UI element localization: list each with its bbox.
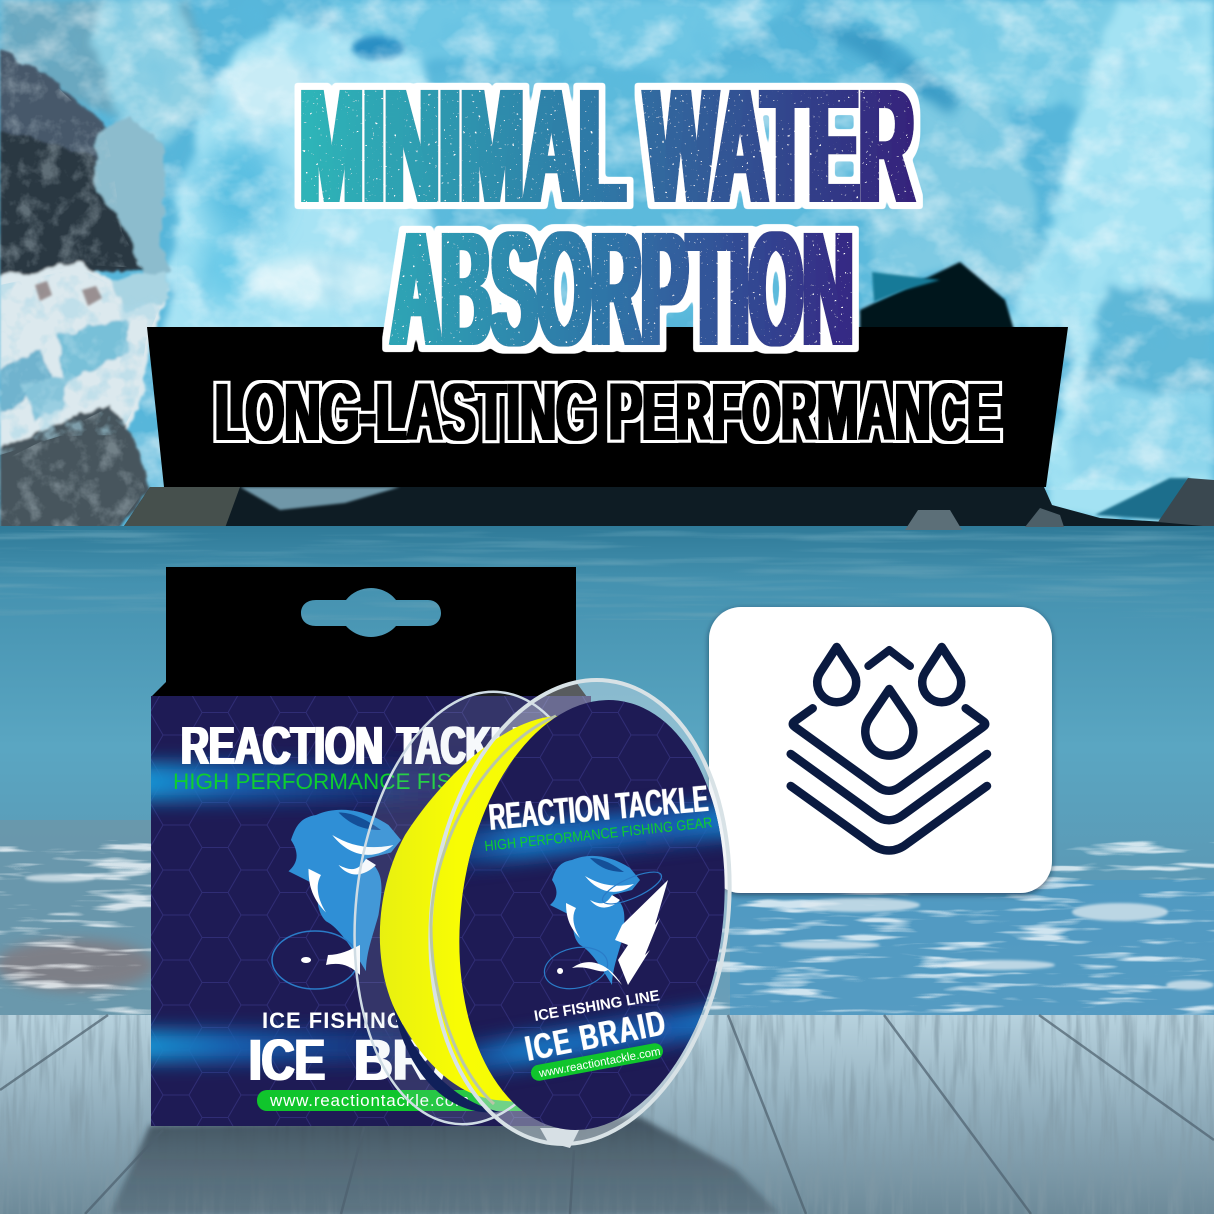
box url pill xyxy=(257,1090,523,1111)
box line type: ICE FISHING LINE xyxy=(262,1008,466,1033)
label tagline: HIGH PERFORMANCE FISHING GEAR xyxy=(484,815,713,855)
product box xyxy=(130,567,610,1126)
box brand name xyxy=(182,726,517,764)
icon: water drops over layers xyxy=(791,647,987,850)
spool inner shadow xyxy=(392,1000,500,1113)
label url pill: www.reactiontackle.com xyxy=(537,1046,662,1080)
rear clear flange xyxy=(334,679,622,1137)
background: glacier ice wall xyxy=(0,0,1214,535)
front flange rim xyxy=(405,663,755,1161)
label brand name: REACTION TACKLE xyxy=(487,778,710,838)
rim inner line over yarn xyxy=(431,716,556,1104)
title xyxy=(300,54,914,380)
box product name: ICE xyxy=(249,1028,325,1093)
icon card: water-repellent layers xyxy=(709,607,1052,893)
front disc label xyxy=(459,700,725,1130)
label fish logo xyxy=(541,856,668,994)
front clear flange xyxy=(405,663,755,1161)
box fish logo xyxy=(272,810,401,989)
spool xyxy=(353,678,732,1148)
label line type: ICE FISHING LINE xyxy=(533,987,661,1025)
box brand name: TACKLE xyxy=(397,716,535,776)
box product name xyxy=(250,1039,444,1080)
box product name: BRAID xyxy=(354,1028,524,1093)
cave xyxy=(860,262,1014,330)
black banner xyxy=(147,327,1068,487)
box url pill: www.reactiontackle.com xyxy=(269,1091,470,1110)
dark base strip xyxy=(120,487,1214,535)
box hang tab xyxy=(151,567,587,697)
rocks xyxy=(0,40,115,165)
background: wooden deck xyxy=(0,1015,1214,1214)
yellow braided line xyxy=(380,716,640,1110)
box front xyxy=(130,696,610,1126)
box tagline: HIGH PERFORMANCE FISHING GEAR xyxy=(173,769,578,794)
box brand name: REACTION xyxy=(181,716,383,776)
label product name: ICE BRAID xyxy=(522,1003,670,1069)
bottom notch xyxy=(540,1128,580,1148)
background: water xyxy=(0,508,1214,1018)
